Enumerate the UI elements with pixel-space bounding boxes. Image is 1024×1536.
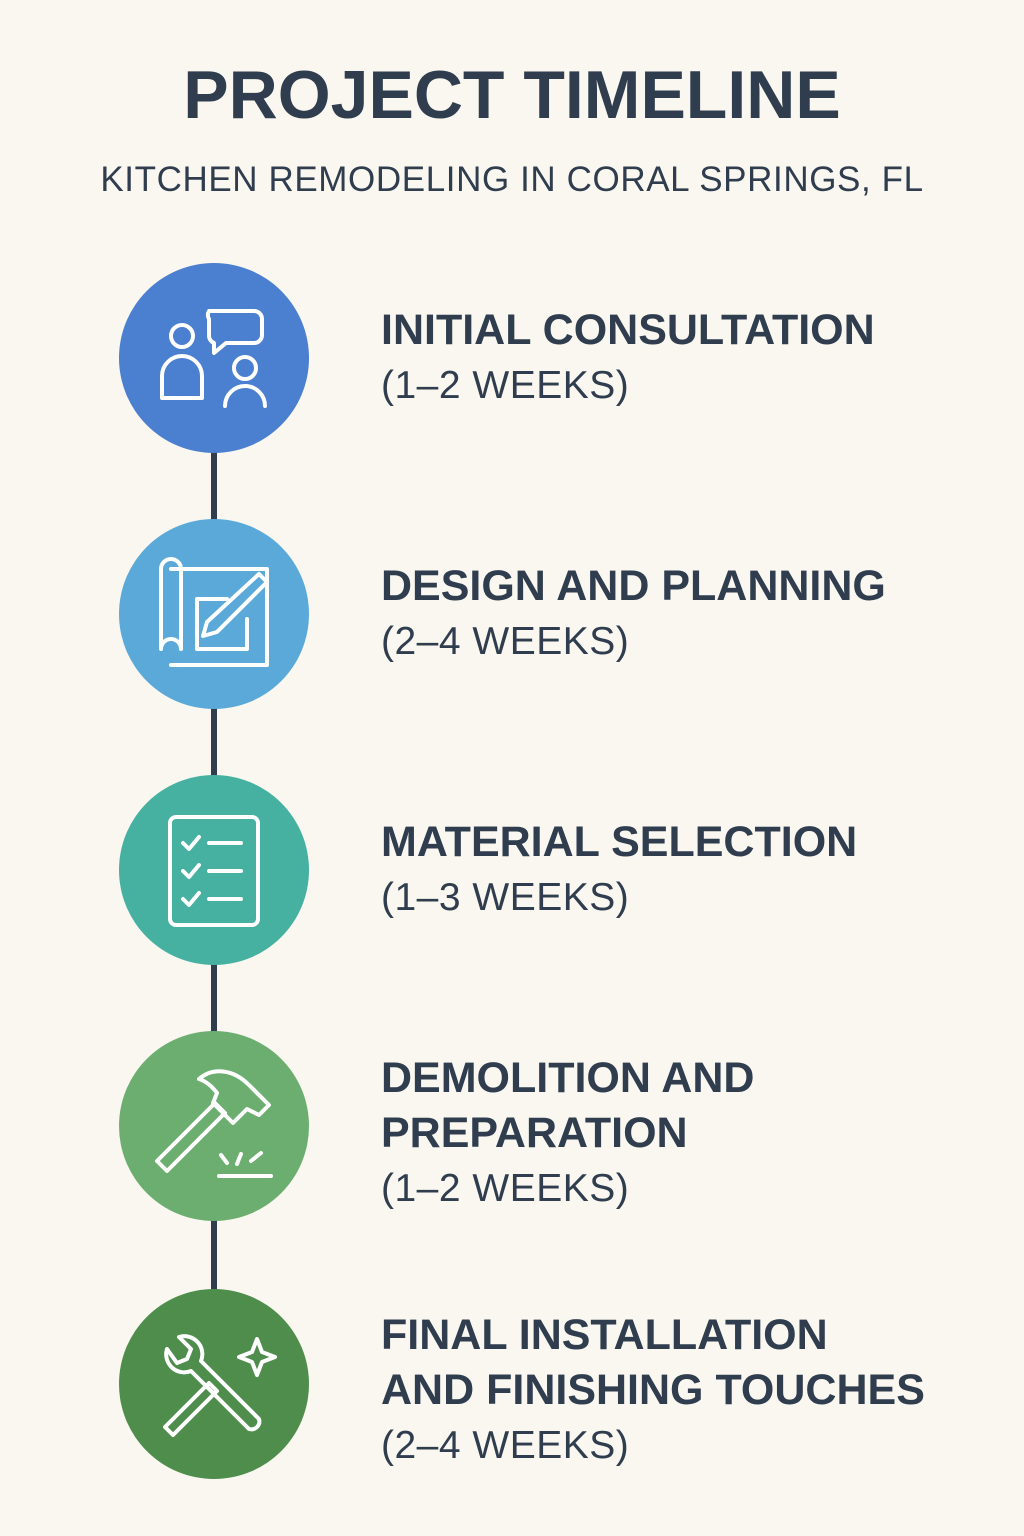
step 2 text [381,562,886,663]
step 4 text [381,1054,754,1210]
step 5 text: AND FINISHING TOUCHES [381,1366,925,1414]
connector line 2 [211,706,217,778]
step 3 text [381,818,857,919]
step 5 text [381,1311,925,1467]
icon: checklist [119,775,309,965]
icon: hammer [119,1031,309,1221]
connector line 1 [211,450,217,522]
step 4 text: PREPARATION [381,1109,688,1157]
step 4 text: (1–2 WEEKS) [381,1167,629,1210]
subtitle: KITCHEN REMODELING IN CORAL SPRINGS, FL [100,160,924,199]
step 2 text: (2–4 WEEKS) [381,620,629,663]
step 3 text: (1–3 WEEKS) [381,876,629,919]
icon: design [119,519,309,709]
step 1 text: (1–2 WEEKS) [381,364,629,407]
step 1 text [381,306,875,407]
step 5 text: (2–4 WEEKS) [381,1424,629,1467]
icon: consultation [119,263,309,453]
connector line 3 [211,962,217,1034]
connector line 4 [211,1218,217,1292]
step 3 text: MATERIAL SELECTION [381,818,857,866]
step 4 text: DEMOLITION AND [381,1054,754,1102]
step 1 text: INITIAL CONSULTATION [381,306,875,354]
icon: tools [119,1289,309,1479]
step 2 text: DESIGN AND PLANNING [381,562,886,610]
step 5 text: FINAL INSTALLATION [381,1311,828,1359]
title: PROJECT TIMELINE [183,57,841,133]
